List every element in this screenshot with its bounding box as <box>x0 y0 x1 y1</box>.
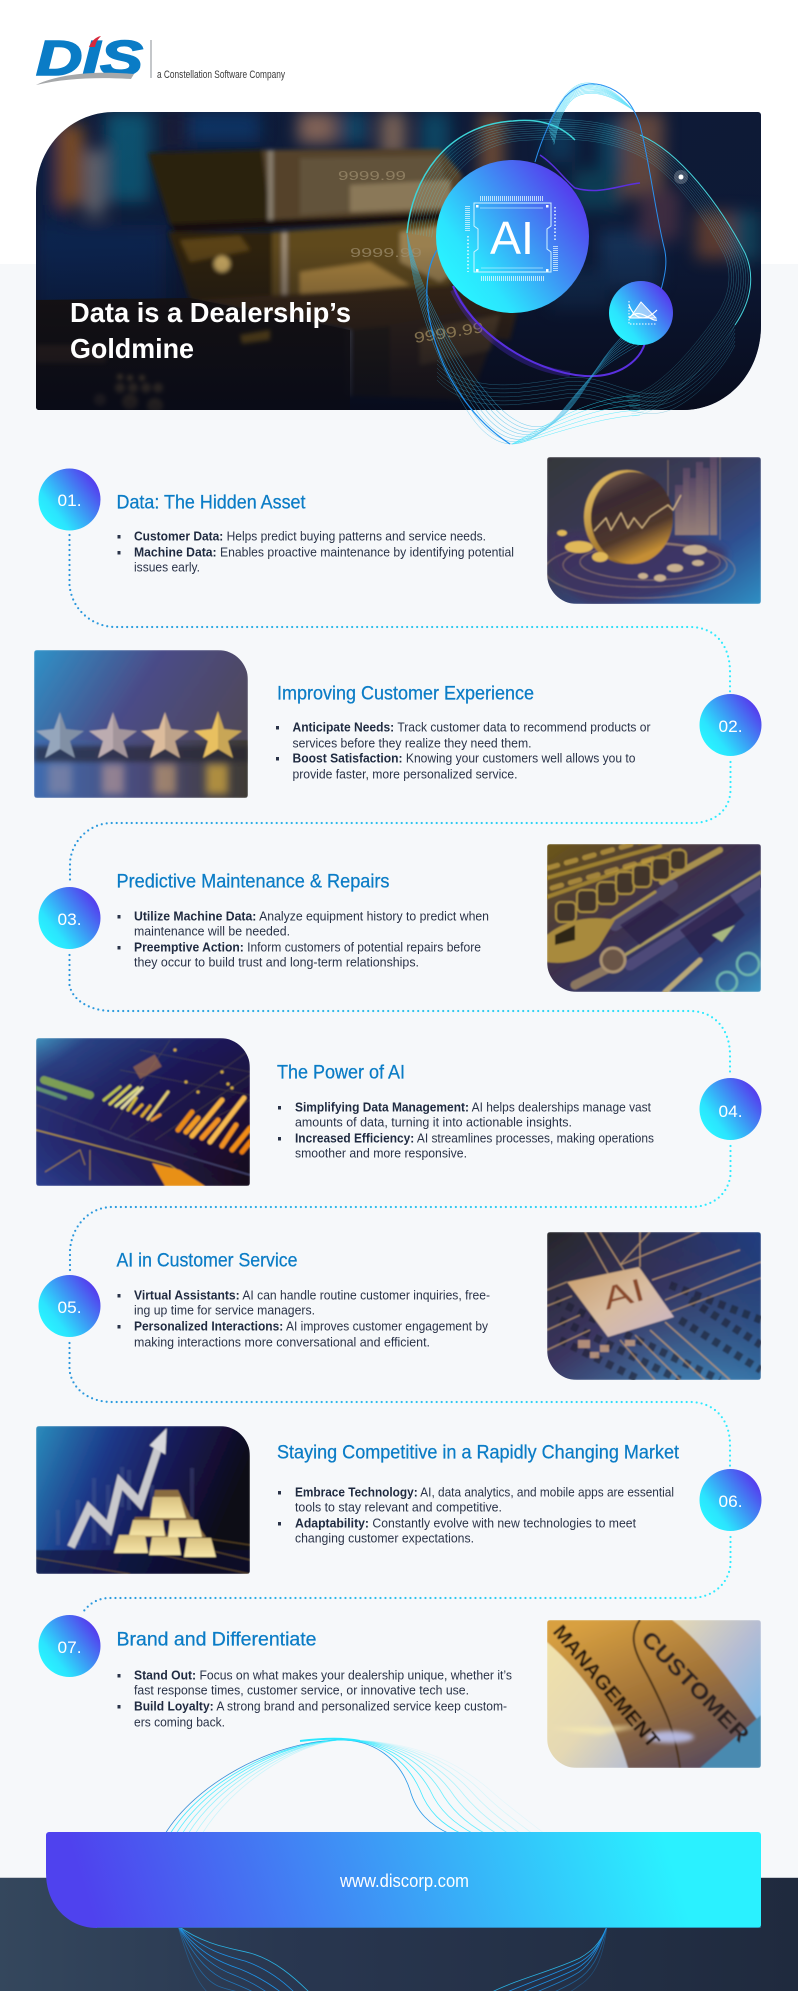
panel: 05 AI in customer service <box>38 1232 761 1380</box>
bullet list <box>278 1486 674 1546</box>
hero photo: gold bars <box>36 112 761 414</box>
middle bar <box>168 232 272 300</box>
image: data chart screen <box>36 1038 250 1186</box>
panel: 06 staying competitive <box>36 1426 762 1574</box>
logo accent <box>89 36 101 47</box>
lower left dark <box>36 298 350 410</box>
image: wrench tools <box>547 842 761 992</box>
logo: DIS <box>36 32 285 86</box>
arrow <box>71 1442 160 1547</box>
bullet list: provide faster, more personalized service. <box>292 768 518 782</box>
logo wordmark: DIS <box>36 32 143 86</box>
footer wave ribbons <box>165 1739 607 1991</box>
image: AI chip: AI <box>598 1271 648 1317</box>
panel: 02 improving customer experience <box>34 650 762 798</box>
lower bar <box>190 284 520 340</box>
bullet list: Increased Efficiency: AI streamlines processes, making operations <box>295 1132 654 1146</box>
bullet list: Utilize Machine Data: Analyze equipment history to predict when <box>134 910 489 924</box>
bullet list: changing customer expectations. <box>295 1532 474 1546</box>
hero title <box>70 297 351 364</box>
bullet list <box>118 1288 490 1350</box>
logo swoosh <box>36 73 134 85</box>
top bar <box>148 149 520 400</box>
number badge 07 <box>38 1615 100 1677</box>
bullet list: they occur to build trust and long-term relationships. <box>134 956 419 970</box>
heading: Data: The Hidden Asset <box>116 492 306 514</box>
number badge 05 <box>38 1275 100 1337</box>
hero photo: gold bars: 9999.99 <box>350 245 422 260</box>
bullet list: smoother and more responsive. <box>295 1146 467 1160</box>
bullet list: Simplifying Data Management: AI helps dealerships manage vast <box>295 1100 651 1114</box>
heading: Staying Competitive in a Rapidly Changing Market <box>277 1442 680 1464</box>
number badge 02: 02. <box>718 717 742 736</box>
bullet list: Adaptability: Constantly evolve with new technologies to meet <box>295 1516 637 1530</box>
image: AI chip <box>547 1232 761 1380</box>
chip outline <box>474 203 551 272</box>
image: gold coin and chart <box>545 457 761 604</box>
violet glow arc <box>453 155 645 376</box>
bullet list: maintenance will be needed. <box>134 924 290 938</box>
bullet list: Build Loyalty: A strong brand and personalized service keep custom- <box>134 1700 507 1714</box>
number badge 06: 06. <box>718 1492 742 1511</box>
number badge 01 <box>38 468 100 530</box>
chip pins <box>468 198 556 278</box>
AI circle with chip icon <box>436 160 589 313</box>
panel: hero banner <box>36 83 761 444</box>
bullet list: issues early. <box>134 560 200 574</box>
heading: Predictive Maintenance & Repairs <box>116 872 390 892</box>
bullet list <box>118 1668 512 1730</box>
top loop ribbon <box>544 83 637 144</box>
heading: AI in Customer Service <box>116 1250 298 1272</box>
number badge 03: 03. <box>58 910 82 929</box>
panel: 03 predictive maintenance <box>38 842 761 992</box>
bullet list: amounts of data, turning it into actionable insights. <box>295 1116 572 1130</box>
bullet list: Machine Data: Enables proactive maintenance by identifying potential <box>134 546 514 560</box>
bullet list: fast response times, customer service, or innovative tech use. <box>134 1684 469 1698</box>
number badge 04 <box>700 1078 762 1140</box>
chart icon <box>629 301 657 324</box>
number badge 02 <box>700 694 762 756</box>
heading: Improving Customer Experience <box>277 684 534 704</box>
logo tagline: a Constellation Software Company <box>157 69 285 81</box>
bullet list: tools to stay relevant and competitive. <box>295 1500 502 1514</box>
AI label: AI <box>490 212 534 264</box>
bullet list: ing up time for service managers. <box>134 1304 315 1318</box>
website url: www.discorp.com <box>339 1870 469 1891</box>
hero title: Goldmine <box>70 333 194 364</box>
footer banner <box>46 1832 761 1928</box>
logo divider <box>150 40 152 78</box>
image: customer management gears: CUSTOMER <box>636 1626 754 1747</box>
panel: 01 data the hidden asset <box>38 457 761 604</box>
sparkle <box>674 170 688 184</box>
9999 marks: 9999.99 <box>338 168 406 183</box>
bullet list: Preemptive Action: Inform customers of potential repairs before <box>134 940 481 954</box>
footer bar <box>0 1877 798 1991</box>
hero title: Data is a Dealership’s <box>70 297 351 328</box>
hero photo: gold bars: 9999.99 <box>413 319 485 347</box>
bullet list: services before they realize they need them. <box>292 736 532 750</box>
bullet list: Personalized Interactions: AI improves customer engagement by <box>134 1320 489 1334</box>
gold bars <box>114 1490 216 1557</box>
bullet list: Boost Satisfaction: Knowing your customers well allows you to <box>292 752 636 766</box>
image: rising arrow and gold bars <box>36 1426 250 1574</box>
wave ribbons around AI circle <box>407 83 751 444</box>
bullet list: Stand Out: Focus on what makes your dealership unique, whether it’s <box>134 1668 512 1682</box>
image: four stars <box>34 650 248 798</box>
heading: The Power of AI <box>277 1062 405 1084</box>
number badge 06 <box>700 1469 762 1531</box>
bullet list <box>118 910 489 970</box>
bullet list: making interactions more conversational and efficient. <box>134 1336 430 1350</box>
bullet list: Customer Data: Helps predict buying patterns and service needs. <box>134 530 486 544</box>
panel: 04 the power of AI <box>36 1038 762 1186</box>
number badge 04: 04. <box>718 1102 742 1121</box>
dotted connector path <box>70 535 730 1612</box>
number badge 03 <box>38 887 100 949</box>
bullet list: Embrace Technology: AI, data analytics, and mobile apps are essential <box>295 1486 674 1500</box>
bullet list <box>278 1100 654 1160</box>
bullet list: Virtual Assistants: AI can handle routine customer inquiries, free- <box>134 1288 490 1302</box>
number badge 05: 05. <box>58 1298 82 1317</box>
bullet list: Anticipate Needs: Track customer data to recommend products or <box>292 720 650 734</box>
bullet list <box>118 530 514 574</box>
number badge 01: 01. <box>58 491 82 510</box>
bullet list: ers coming back. <box>134 1716 225 1730</box>
heading: Brand and Differentiate <box>116 1630 316 1650</box>
bullet list <box>276 720 650 782</box>
image: customer management gears: MANAGEMENT <box>548 1621 663 1752</box>
small circle with chart icon <box>609 281 673 345</box>
image: customer management gears <box>547 1620 761 1768</box>
panel: 07 brand and differentiate <box>38 1615 761 1768</box>
number badge 07: 07. <box>58 1638 82 1657</box>
